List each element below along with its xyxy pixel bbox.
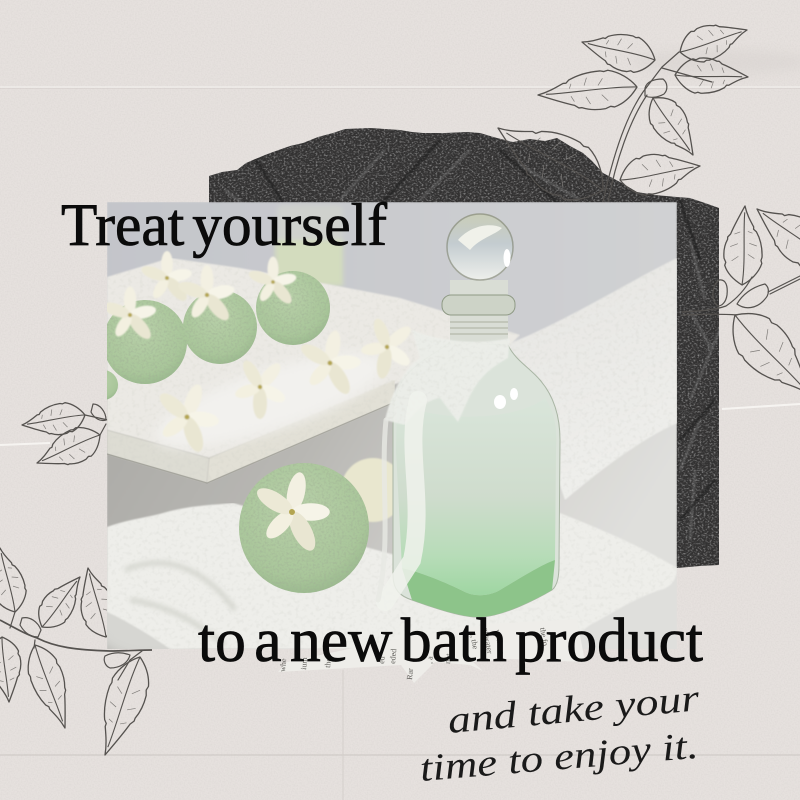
bottle liquid bbox=[397, 457, 556, 596]
flowers on tray bbox=[107, 250, 410, 452]
torn newspaper strip: the bbox=[323, 657, 333, 668]
torn newspaper strip: Rar bbox=[405, 668, 415, 680]
torn newspaper strip: w, there bbox=[493, 629, 506, 656]
photo: bath products on towels bbox=[88, 202, 677, 660]
torn newspaper strip: ed bbox=[377, 656, 387, 664]
torn newspaper strip: ium bbox=[299, 656, 309, 670]
glass stopper bbox=[446, 214, 514, 280]
heading: Treat yourself: Treat yourself bbox=[61, 192, 387, 258]
torn newspaper strip: d, the bbox=[468, 631, 480, 650]
botanical sprig: top right bbox=[483, 14, 752, 216]
torn newspaper strip: of water bbox=[481, 627, 495, 655]
photo backdrop bbox=[90, 202, 677, 660]
botanical sprig: right edge bbox=[682, 191, 800, 411]
botanical sprig: bottom left bbox=[0, 544, 158, 761]
torn newspaper strip: , a bbox=[425, 655, 435, 664]
small bath bombs bbox=[88, 271, 330, 400]
torn newspaper strip: whe bbox=[278, 658, 288, 672]
botanical sprig: left middle bbox=[20, 400, 108, 478]
bottle body bbox=[393, 342, 560, 617]
bottle base bbox=[402, 560, 555, 617]
washcloth towel bbox=[107, 503, 677, 649]
script line: time to enjoy it.: time to enjoy it. bbox=[418, 725, 700, 790]
script line: and take your: and take your bbox=[446, 677, 701, 742]
torn newspaper strip bbox=[278, 619, 585, 683]
bottle flange bbox=[442, 295, 515, 315]
cream ball bbox=[344, 458, 392, 522]
towel roll bbox=[505, 258, 677, 500]
lace ribbon bbox=[378, 330, 510, 602]
torn newspaper strip: not bbox=[443, 652, 453, 664]
large bath bomb bbox=[239, 463, 369, 593]
glass bottle bbox=[393, 214, 560, 617]
background bottle bbox=[275, 205, 343, 286]
dark crumpled paper bbox=[205, 120, 725, 575]
heading: to a new bath product: to a new bath product bbox=[198, 607, 703, 675]
torn newspaper strip: eded bbox=[388, 648, 398, 664]
bottle neck bbox=[450, 280, 508, 344]
tray bbox=[107, 258, 520, 483]
torn newspaper strip: the fo bbox=[538, 627, 550, 647]
